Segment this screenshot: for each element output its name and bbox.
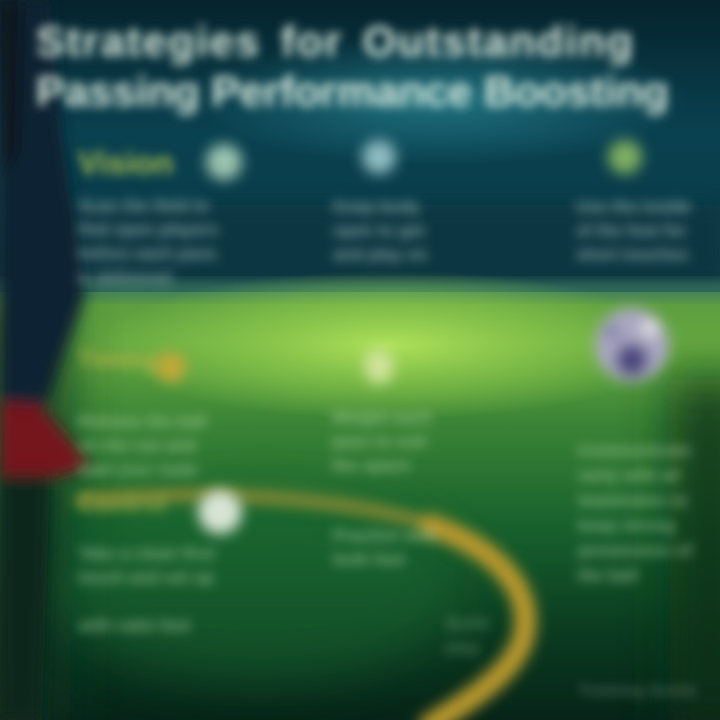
panel: top centre tip	[328, 132, 431, 268]
text: top centre: open to get	[333, 221, 425, 240]
text: top left: Scan the field to	[78, 196, 209, 215]
icon: lower left	[198, 490, 242, 534]
text: top right	[572, 196, 694, 266]
text: lower centre tip: both feet	[333, 550, 405, 569]
text: lower centre tip: Practise with	[333, 526, 438, 545]
text: lower left: with calm feet	[78, 616, 190, 635]
panel: top left tip	[73, 135, 252, 288]
text: top left: is delivered	[78, 268, 172, 287]
icon: top right	[608, 140, 642, 174]
icon: top left	[206, 144, 242, 180]
text: curve caption	[444, 614, 491, 658]
icon: middle left	[156, 352, 186, 382]
text: top right: short touches	[576, 245, 688, 264]
text: middle right tip: keep strong	[578, 516, 674, 535]
title: Strategies for Outstanding	[36, 18, 635, 66]
text: middle right tip: teammates to	[578, 491, 688, 510]
text: top right: Use the inside	[576, 197, 691, 216]
text: top right: of the foot for	[576, 221, 686, 240]
text: middle right tip	[574, 441, 696, 587]
text: middle centre: Weight each	[332, 408, 432, 427]
text: middle right tip: possession of	[578, 541, 692, 560]
title	[30, 18, 674, 122]
text: middle left: lead your mate	[78, 460, 198, 479]
heading: lower left: Control	[78, 490, 167, 518]
text: top centre: and play on	[333, 245, 427, 264]
icon: middle centre	[364, 348, 394, 384]
text: middle left: Release the ball	[78, 412, 207, 431]
text: middle left: on the run and	[78, 436, 196, 455]
text: curve caption: Build	[446, 614, 488, 633]
text: lower left: touch and set up	[78, 568, 214, 587]
text: middle centre	[328, 408, 434, 478]
text: top centre: Keep body	[333, 197, 420, 216]
text: middle right tip: Communicate	[578, 441, 690, 460]
text: top left: find open players	[78, 220, 219, 239]
text: top left: before each pass	[78, 244, 217, 263]
text: middle right tip: the ball	[578, 566, 638, 585]
panel: lower left tip	[74, 480, 252, 637]
text: middle right tip: early with all	[578, 466, 680, 485]
text: lower centre tip	[328, 524, 440, 570]
text: middle left	[74, 411, 210, 481]
title: Passing Performance Boosting	[36, 68, 668, 116]
text: top centre	[328, 196, 431, 268]
heading: middle left: Timing	[78, 346, 159, 374]
panel: middle left tip	[74, 345, 210, 481]
text: lower left	[74, 542, 218, 637]
footer: source note: Training Guide	[578, 681, 697, 700]
panel: middle centre tip	[328, 342, 434, 478]
text: lower left: Take a clean first	[78, 544, 215, 563]
heading: top left: Vision	[78, 145, 173, 181]
panel: top right tip	[572, 132, 694, 266]
text: middle centre: pass to suit	[332, 432, 426, 451]
text: curve caption: play	[446, 638, 480, 657]
text: middle centre: the space	[332, 456, 410, 475]
text: top left	[73, 194, 222, 288]
icon: top centre	[362, 140, 396, 174]
